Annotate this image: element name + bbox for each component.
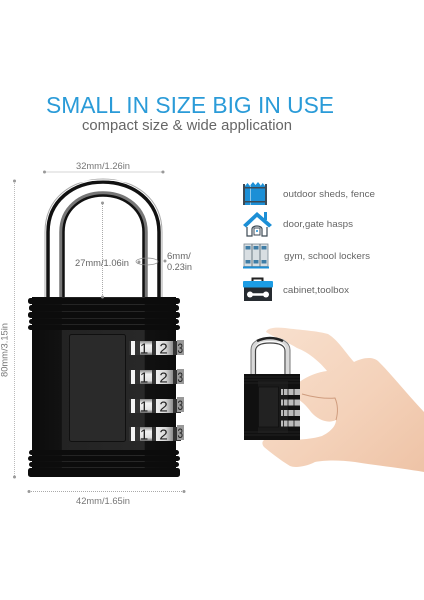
icon: toolbox [243,278,273,301]
icon: fence [243,182,267,205]
dimension: total height [0,180,16,478]
bottom ribs [28,450,180,477]
dial row 1: 3 [178,340,183,356]
dial row 4 [129,425,184,444]
dimension: body width [28,490,186,507]
label: outdoor: outdoor sheds, fence [283,189,375,200]
dimension: shackle thickness: 6mm/ [167,251,191,262]
top ribs [28,298,180,330]
small padlock shackle [251,338,290,374]
dial row 2: 1 [140,370,148,386]
hand [262,328,424,472]
photo: hand holding padlock [244,328,424,472]
small padlock dials [281,389,300,426]
lock body [32,297,176,477]
dimension: shackle width [43,161,164,174]
small padlock body [244,374,300,440]
subtitle: compact size & wide application [82,118,292,134]
dimension: shackle thickness [136,251,192,273]
icon: lockers [243,244,269,268]
title: SMALL IN SIZE BIG IN USE [46,92,334,118]
dial row 2 [129,369,184,386]
dial row 3: 3 [178,397,183,413]
dial row 1: 1 [140,340,148,358]
label: cabinet: cabinet,toolbox [283,285,349,296]
icon: house [243,212,272,236]
dial row 2: 3 [178,369,183,385]
finger creases [302,394,337,420]
dial row 3 [129,397,184,416]
main padlock [28,179,184,477]
label: door: door,gate hasps [283,219,353,230]
dimension: body width: 42mm/1.65in [76,496,130,507]
dimension: shackle width: 32mm/1.26in [76,161,130,172]
dial row 2: 2 [159,370,168,386]
label: gym: gym, school lockers [284,251,370,262]
dimension: inner height [75,202,129,298]
dial row 4: 3 [178,425,183,441]
dial row 3: 1 [140,398,148,416]
shackle [45,179,162,298]
dimension: inner height: 27mm/1.06in [75,258,129,269]
dimension: shackle thickness: 0.23in [167,262,192,273]
dial row 1: 2 [159,340,168,358]
dial row 3: 2 [159,398,168,416]
label panel [70,334,126,442]
dial row 4: 2 [159,426,168,444]
dial row 4: 1 [140,426,148,444]
dial row 1 [129,340,184,358]
